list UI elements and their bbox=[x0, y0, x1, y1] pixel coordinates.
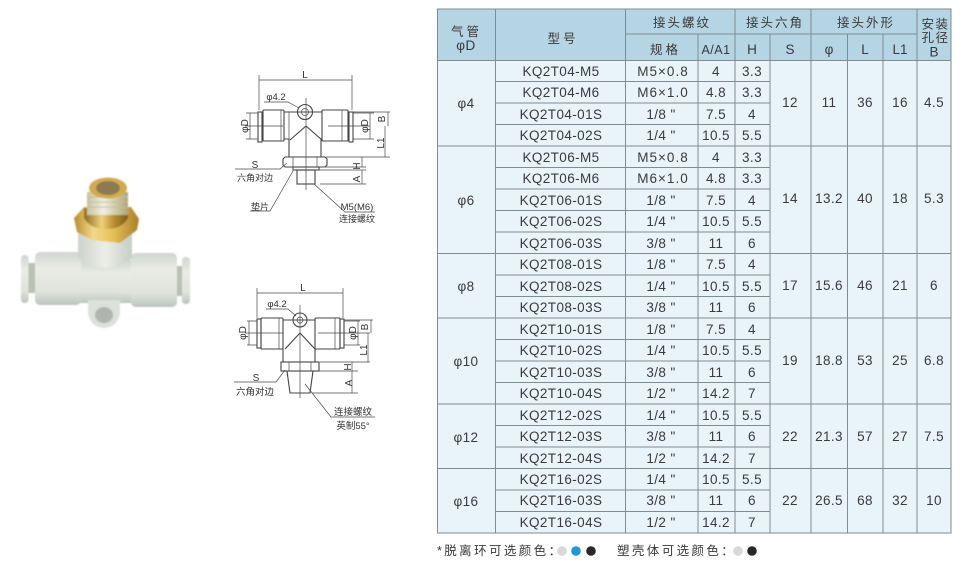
phi D left: φD bbox=[238, 326, 249, 340]
phi D right bbox=[353, 113, 374, 139]
table header: 规格 bbox=[650, 42, 681, 57]
group: phi 8: 7.5 bbox=[706, 257, 726, 272]
B, L1, H, A dimensions: B bbox=[377, 115, 388, 122]
phi D right bbox=[344, 321, 360, 345]
B, L1, H, A dimensions: B bbox=[360, 323, 371, 330]
S label: S bbox=[253, 373, 260, 384]
group: phi 4: 36 bbox=[857, 95, 873, 110]
group: phi 8: 4 bbox=[748, 257, 756, 272]
product photo: T-shaped push-in fitting bbox=[21, 178, 190, 328]
group: phi 8: 15.6 bbox=[815, 278, 843, 293]
group: phi 6: KQ2T06-02S bbox=[520, 214, 602, 229]
phi D left bbox=[238, 321, 257, 345]
specification table bbox=[437, 9, 951, 533]
B, L1, H, A dimensions: A bbox=[352, 175, 363, 182]
left collar bbox=[27, 263, 37, 293]
group: phi 16: 1/2 " bbox=[646, 515, 676, 530]
group: phi 4: 4 bbox=[712, 64, 720, 79]
L dimension: L bbox=[302, 70, 308, 81]
group: phi 10: 1/8 " bbox=[646, 322, 676, 337]
phi D left bbox=[240, 113, 258, 139]
bore bbox=[96, 181, 120, 195]
group: phi 4: 4.5 bbox=[924, 95, 944, 110]
group: phi 4: KQ2T04-02S bbox=[520, 128, 602, 143]
group: phi 10 bbox=[454, 322, 944, 401]
group: phi 4: 11 bbox=[822, 95, 836, 110]
group: phi 16: 5.5 bbox=[742, 472, 762, 487]
group: phi 12: 7.5 bbox=[924, 429, 944, 444]
table header: B bbox=[929, 44, 939, 60]
table header: 接头外形 bbox=[837, 15, 895, 30]
group: phi 8: 6 bbox=[930, 278, 938, 293]
group: phi 10: 19 bbox=[782, 353, 798, 368]
table header: 接头螺纹 bbox=[653, 15, 711, 30]
group: phi 6: 5.3 bbox=[924, 191, 944, 206]
B, L1, H, A dimensions: L1 bbox=[359, 344, 370, 356]
group: phi 4: 1/4 " bbox=[646, 128, 676, 143]
table header: 孔径 bbox=[921, 31, 950, 45]
right collar bbox=[175, 266, 184, 296]
thread label bbox=[314, 184, 375, 224]
L dimension: L bbox=[300, 283, 306, 294]
group: phi 4: 5.5 bbox=[742, 128, 762, 143]
thread label: 连接螺纹 bbox=[339, 213, 375, 224]
table header: L bbox=[861, 42, 869, 57]
washer label bbox=[250, 171, 293, 212]
group: phi 8: φ8 bbox=[457, 279, 475, 294]
group: phi 4: 7.5 bbox=[706, 107, 726, 122]
thread label: 连接螺纹 bbox=[334, 406, 372, 418]
group: phi 10: 14.2 bbox=[702, 386, 730, 401]
table header: 型号 bbox=[547, 32, 579, 46]
group: phi 12: 14.2 bbox=[702, 451, 730, 466]
group: phi 10: 18.8 bbox=[815, 353, 843, 368]
group: phi 12: 3/8 " bbox=[646, 429, 676, 444]
table header: 接头六角 bbox=[746, 15, 804, 30]
bottom port bbox=[88, 300, 120, 328]
group: phi 4: KQ2T04-M6 bbox=[522, 85, 600, 100]
group: phi 12: φ12 bbox=[454, 430, 478, 445]
group: phi 4: 16 bbox=[892, 95, 908, 110]
group: phi 16: KQ2T16-04S bbox=[520, 515, 602, 530]
group: phi 8: 3/8 " bbox=[646, 300, 676, 315]
group: phi 16: 32 bbox=[892, 493, 908, 508]
S label: 六角对边 bbox=[236, 386, 274, 398]
group: phi 8 bbox=[457, 257, 938, 315]
group: phi 6 bbox=[457, 150, 944, 251]
group: phi 10: 7 bbox=[748, 386, 756, 401]
group: phi 16 bbox=[454, 472, 942, 530]
group: phi 16: 6 bbox=[748, 493, 756, 508]
group: phi 8: KQ2T08-02S bbox=[520, 279, 602, 294]
shell colour dots bbox=[733, 546, 757, 556]
fitting outline bbox=[245, 305, 370, 398]
group: phi 12: 7 bbox=[748, 451, 756, 466]
group: phi 8: 21 bbox=[892, 278, 908, 293]
S label: S bbox=[252, 160, 259, 171]
L dimension bbox=[259, 70, 352, 110]
group: phi 16: 22 bbox=[782, 493, 798, 508]
group: phi 6: KQ2T06-M6 bbox=[522, 171, 600, 186]
group: phi 6: 4 bbox=[712, 150, 720, 165]
S label: 六角对边 bbox=[237, 172, 273, 183]
phi D left: φD bbox=[240, 119, 251, 133]
group: phi 6: 5.5 bbox=[742, 214, 762, 229]
dimension drawing: taper thread version bbox=[234, 283, 375, 432]
B, L1, H, A dimensions: A bbox=[344, 379, 355, 386]
B, L1, H, A dimensions bbox=[312, 320, 373, 393]
group: phi 16: 10 bbox=[926, 493, 942, 508]
group: phi 6: KQ2T06-01S bbox=[520, 193, 602, 208]
release ring colour dots bbox=[557, 546, 596, 556]
group: phi 10: 5.5 bbox=[742, 343, 762, 358]
group: phi 10: 1/2 " bbox=[646, 386, 676, 401]
group: phi 16: KQ2T16-03S bbox=[520, 493, 602, 508]
group: phi 6: 1/4 " bbox=[646, 214, 676, 229]
group: phi 4: 12 bbox=[782, 95, 798, 110]
group: phi 10: KQ2T10-03S bbox=[520, 365, 602, 380]
group: phi 4 bbox=[457, 64, 944, 143]
group: phi 6: 3/8 " bbox=[646, 236, 676, 251]
group: phi 6: KQ2T06-03S bbox=[520, 236, 602, 251]
group: phi 6: 3.3 bbox=[742, 171, 762, 186]
group: phi 12: 5.5 bbox=[742, 408, 762, 423]
group: phi 8: 1/8 " bbox=[646, 257, 676, 272]
bore label: φ4.2 bbox=[266, 92, 286, 103]
group: phi 16: KQ2T16-02S bbox=[520, 472, 602, 487]
brass hex nut bbox=[74, 207, 139, 243]
table header: φD bbox=[456, 38, 476, 53]
group: phi 6: 3.3 bbox=[742, 150, 762, 165]
group: phi 12: KQ2T12-03S bbox=[520, 429, 602, 444]
colour options note bbox=[437, 543, 757, 558]
phi D right: φD bbox=[348, 326, 359, 340]
group: phi 10: 10.5 bbox=[702, 343, 730, 358]
group: phi 10: 1/4 " bbox=[646, 343, 676, 358]
table header: L1 bbox=[892, 42, 908, 57]
group: phi 8: 11 bbox=[709, 300, 723, 315]
group: phi 4: 1/8 " bbox=[646, 107, 676, 122]
group: phi 16: 11 bbox=[709, 493, 723, 508]
group: phi 8: 5.5 bbox=[742, 279, 762, 294]
B, L1, H, A dimensions: L1 bbox=[376, 137, 387, 149]
group: phi 8: KQ2T08-01S bbox=[520, 257, 602, 272]
group: phi 16: 68 bbox=[857, 493, 873, 508]
table header: S bbox=[785, 42, 795, 57]
group: phi 4: 4.8 bbox=[706, 85, 726, 100]
group: phi 6: KQ2T06-M5 bbox=[522, 150, 600, 165]
group: phi 4: M5×0.8 bbox=[637, 64, 689, 79]
group: phi 8: 6 bbox=[748, 300, 756, 315]
group: phi 6: φ6 bbox=[457, 193, 475, 208]
group: phi 6: 11 bbox=[709, 236, 723, 251]
group: phi 6: 4 bbox=[748, 193, 756, 208]
group: phi 6: 1/8 " bbox=[646, 193, 676, 208]
bore label bbox=[264, 92, 299, 108]
group: phi 6: 10.5 bbox=[702, 214, 730, 229]
group: phi 12: KQ2T12-02S bbox=[520, 408, 602, 423]
group: phi 10: KQ2T10-01S bbox=[520, 322, 602, 337]
group: phi 6: 40 bbox=[857, 191, 873, 206]
S label bbox=[234, 370, 285, 398]
group: phi 12: 11 bbox=[709, 429, 723, 444]
group: phi 6: 4.8 bbox=[706, 171, 726, 186]
group: phi 4: KQ2T04-M5 bbox=[522, 64, 600, 79]
group: phi 16: 14.2 bbox=[702, 515, 730, 530]
group: phi 4: 4 bbox=[748, 107, 756, 122]
group: phi 6: 13.2 bbox=[815, 191, 843, 206]
washer label: 垫片 bbox=[251, 201, 269, 212]
group: phi 10: 6 bbox=[748, 365, 756, 380]
thread bbox=[87, 192, 128, 215]
shell colours label: 塑壳体可选颜色： bbox=[617, 543, 736, 558]
release ring colours label: *脱离环可选颜色： bbox=[437, 543, 563, 558]
thread label bbox=[305, 384, 375, 432]
group: phi 12: KQ2T12-04S bbox=[520, 451, 602, 466]
group: phi 10: 7.5 bbox=[706, 322, 726, 337]
group: phi 16: 10.5 bbox=[702, 472, 730, 487]
group: phi 8: KQ2T08-03S bbox=[520, 300, 602, 315]
group: phi 4: M6×1.0 bbox=[637, 85, 689, 100]
group: phi 12: 6 bbox=[748, 429, 756, 444]
group: phi 4: KQ2T04-01S bbox=[520, 107, 602, 122]
group: phi 10: 25 bbox=[892, 353, 908, 368]
grid lines bbox=[437, 9, 951, 533]
brass top ring bbox=[89, 178, 127, 198]
thread label: 英制55° bbox=[336, 420, 370, 432]
table header: A/A1 bbox=[701, 43, 731, 57]
group: phi 16: 26.5 bbox=[815, 493, 843, 508]
group: phi 10: KQ2T10-02S bbox=[520, 343, 602, 358]
group: phi 6: 18 bbox=[892, 191, 908, 206]
right body bbox=[131, 253, 177, 307]
group: phi 10: 53 bbox=[857, 353, 873, 368]
B, L1, H, A dimensions bbox=[312, 112, 390, 184]
table background bbox=[438, 9, 951, 533]
thread label: M5(M6) bbox=[341, 202, 373, 213]
table header: φ bbox=[825, 42, 834, 57]
group: phi 4: φ4 bbox=[457, 96, 475, 111]
group: phi 4: 10.5 bbox=[702, 128, 730, 143]
group: phi 6: 14 bbox=[782, 191, 798, 206]
bore label: φ4.2 bbox=[267, 299, 287, 310]
group: phi 12: 57 bbox=[857, 429, 873, 444]
group: phi 10: KQ2T10-04S bbox=[520, 386, 602, 401]
group: phi 4: 3.3 bbox=[742, 85, 762, 100]
group: phi 10: 3/8 " bbox=[646, 365, 676, 380]
group: phi 16: 1/4 " bbox=[646, 472, 676, 487]
group: phi 16: 7 bbox=[748, 515, 756, 530]
table header: 气管 bbox=[451, 24, 482, 39]
group: phi 16: 3/8 " bbox=[646, 493, 676, 508]
group: phi 12: 22 bbox=[782, 429, 798, 444]
group: phi 6: M5×0.8 bbox=[637, 150, 689, 165]
group: phi 12: 27 bbox=[892, 429, 908, 444]
group: phi 4: 3.3 bbox=[742, 64, 762, 79]
table header bbox=[451, 15, 950, 60]
phi D right: φD bbox=[360, 119, 371, 133]
fitting outline bbox=[245, 98, 370, 190]
dimension drawing: M5/M6 thread version bbox=[235, 70, 390, 224]
group: phi 6: M6×1.0 bbox=[637, 171, 689, 186]
L dimension bbox=[257, 283, 343, 318]
vertical body bbox=[78, 232, 132, 268]
group: phi 12: 1/2 " bbox=[646, 451, 676, 466]
table header: 安装 bbox=[921, 16, 950, 32]
group: phi 6: 6 bbox=[748, 236, 756, 251]
group: phi 10: φ10 bbox=[454, 354, 478, 369]
group: phi 8: 1/4 " bbox=[646, 279, 676, 294]
S label bbox=[235, 160, 287, 183]
group: phi 8: 46 bbox=[857, 278, 873, 293]
group: phi 12: 1/4 " bbox=[646, 408, 676, 423]
group: phi 10: 11 bbox=[709, 365, 723, 380]
table header: H bbox=[747, 42, 757, 57]
brass neck bbox=[84, 208, 128, 229]
group: phi 12 bbox=[454, 408, 944, 466]
B, L1, H, A dimensions: H bbox=[352, 162, 363, 170]
centre body bbox=[78, 260, 134, 303]
group: phi 16: φ16 bbox=[454, 494, 478, 509]
left body bbox=[35, 252, 81, 305]
right release flange bbox=[182, 257, 190, 304]
group: phi 6: 7.5 bbox=[706, 193, 726, 208]
bore label bbox=[266, 299, 296, 316]
group: phi 10: 6.8 bbox=[924, 353, 944, 368]
group: phi 8: 17 bbox=[782, 278, 798, 293]
left release flange bbox=[21, 255, 28, 303]
B, L1, H, A dimensions: H bbox=[343, 363, 354, 371]
group: phi 10: 4 bbox=[748, 322, 756, 337]
group: phi 12: 10.5 bbox=[702, 408, 730, 423]
group: phi 8: 10.5 bbox=[702, 279, 730, 294]
group: phi 12: 21.3 bbox=[815, 429, 843, 444]
